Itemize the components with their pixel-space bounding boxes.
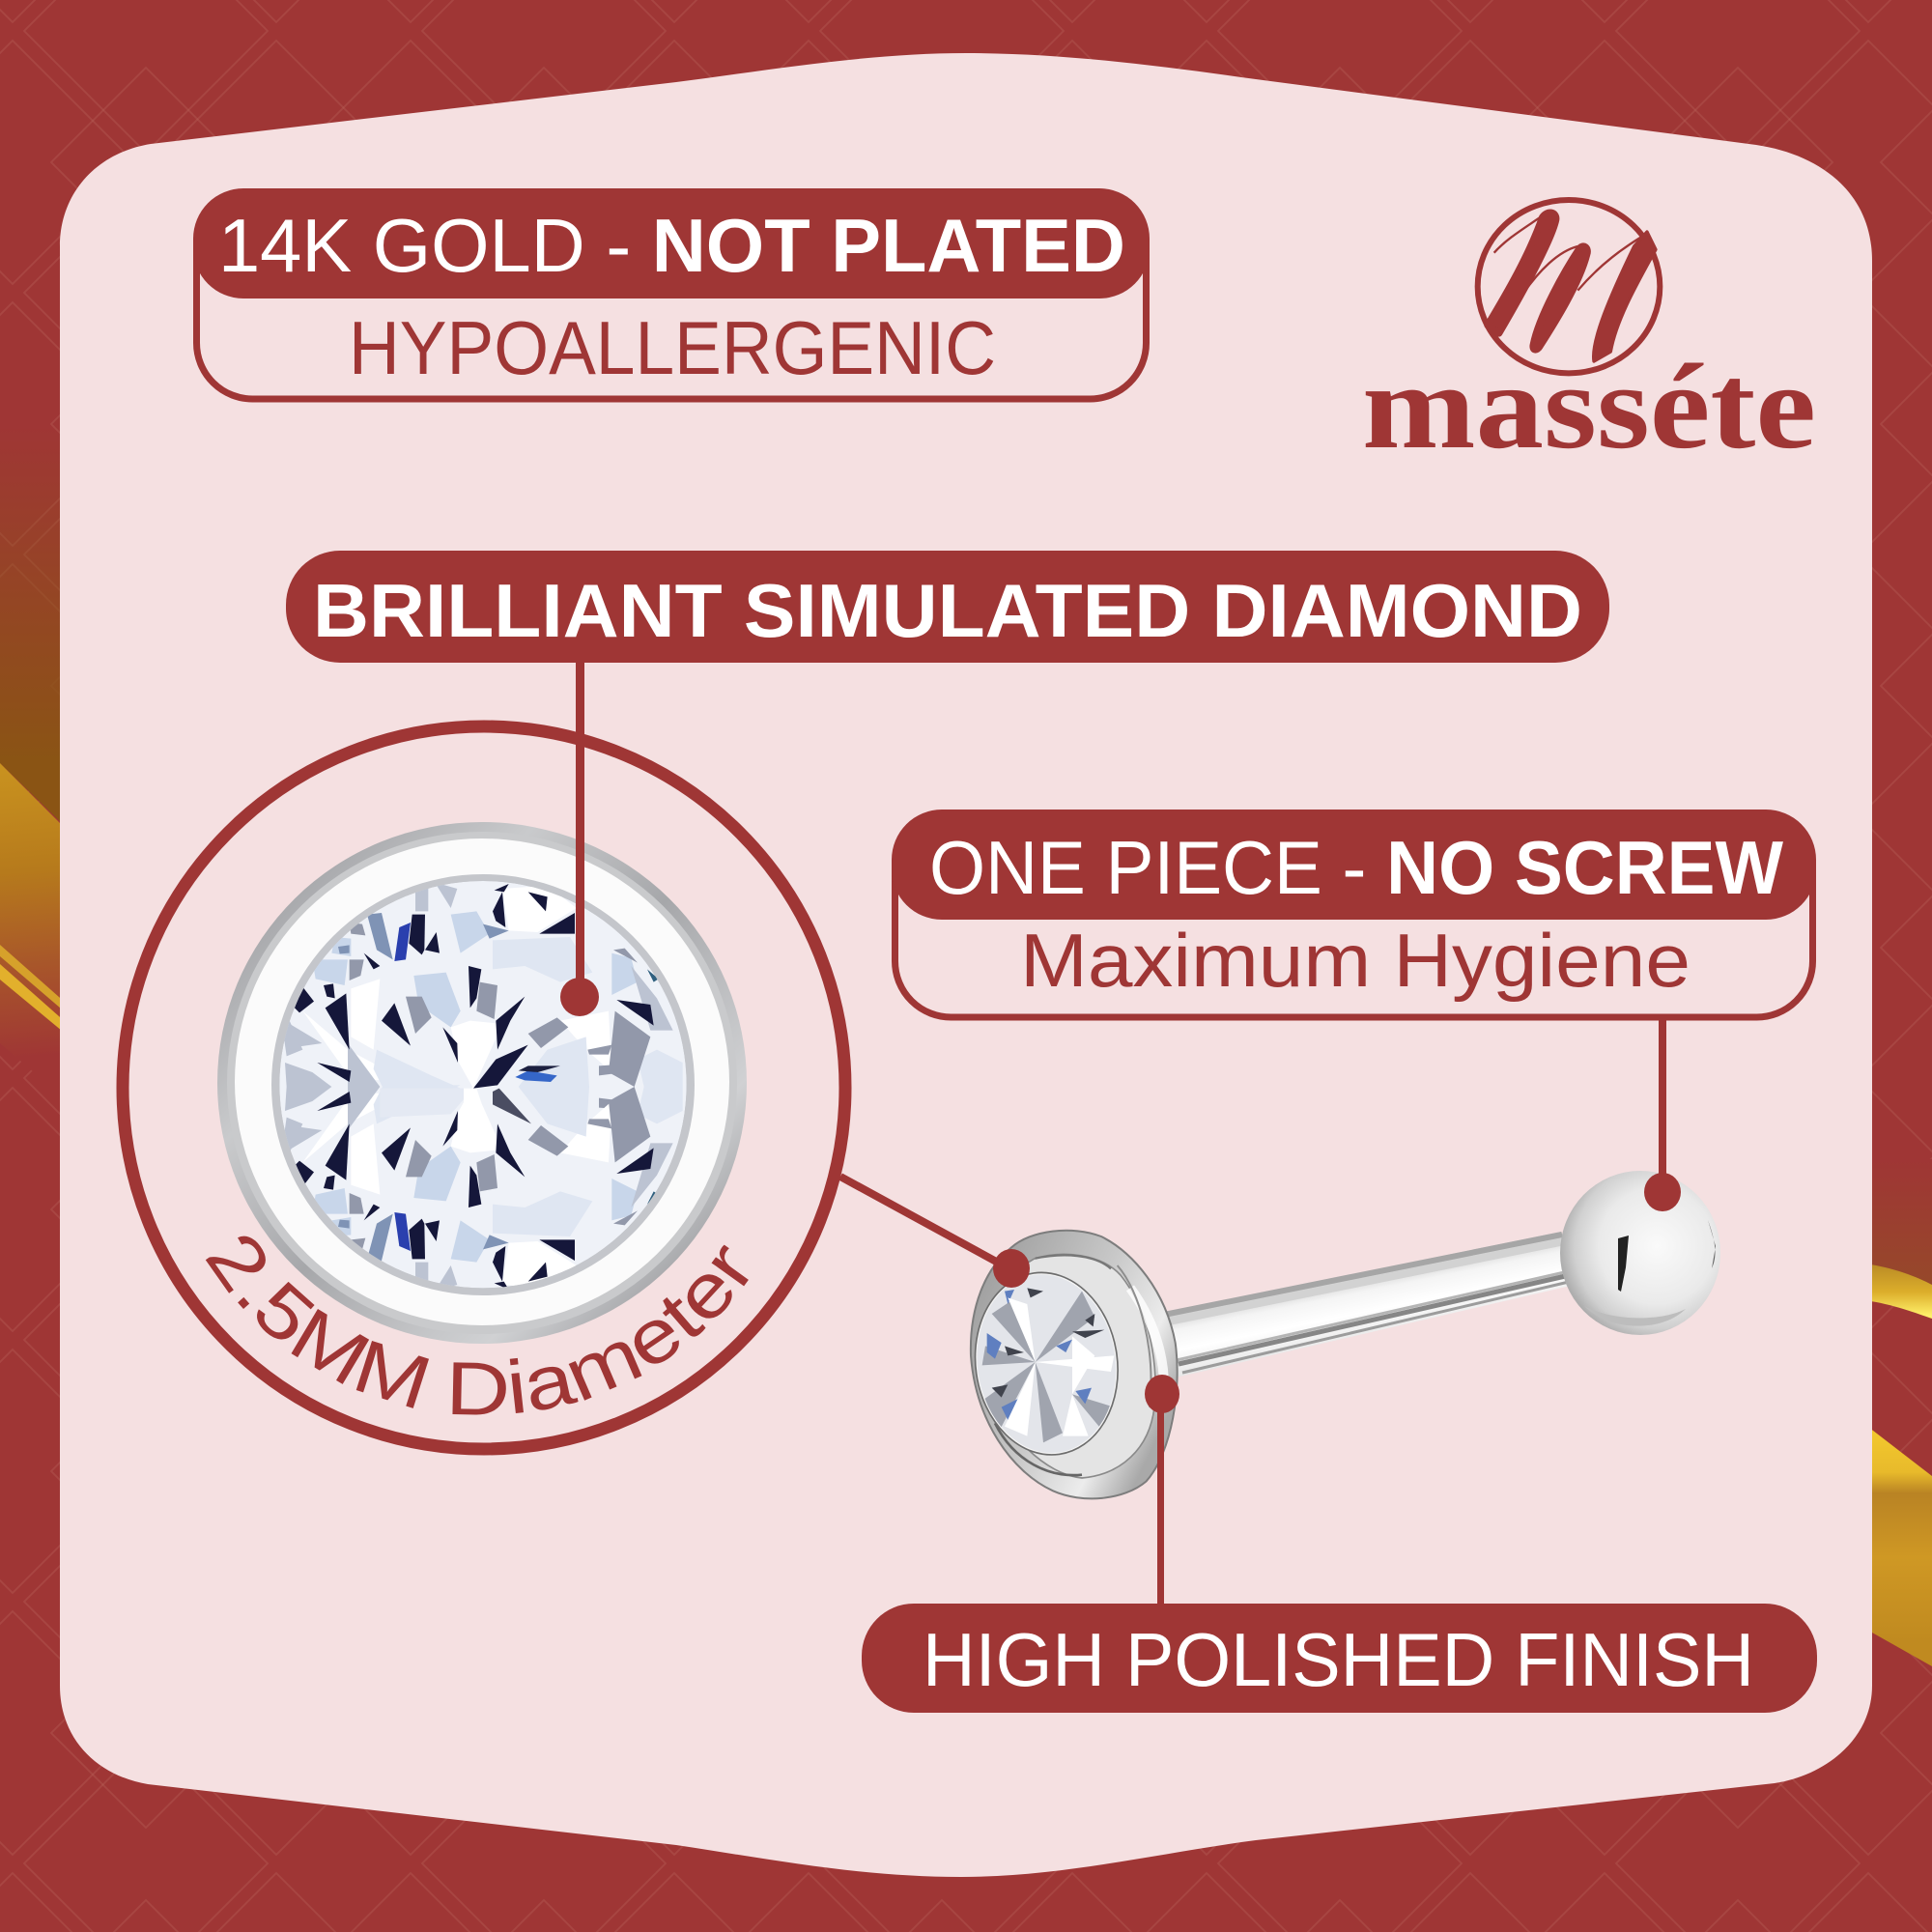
- badge: 14K gold not plated: [193, 188, 1150, 399]
- logo: massete: [1362, 200, 1816, 474]
- ball end: [1560, 1171, 1720, 1335]
- annotation: diameter: 2.5MM Diameter: [205, 1236, 749, 1414]
- shaft: [1150, 1232, 1587, 1381]
- wordmark: masséte: [1362, 340, 1816, 474]
- subheading: maximum hygiene: Maximum Hygiene: [1020, 918, 1690, 1003]
- icon: monogram in circle: [1478, 200, 1660, 373]
- badge: one piece no screw: [892, 810, 1816, 1017]
- leader line: diamond callout: [560, 661, 599, 1016]
- leader line: no screw callout: [1644, 1016, 1681, 1211]
- subheading: hypoallergenic: HYPOALLERGENIC: [349, 305, 996, 390]
- heading: one piece: ONE PIECE - NO SCREW: [929, 825, 1783, 910]
- badge: high polished finish: HIGH POLISHED FINISH: [923, 1617, 1754, 1702]
- badge: high polished finish: [862, 1604, 1817, 1713]
- product: nose stud pin: [964, 1171, 1720, 1498]
- head bezel: [964, 1231, 1178, 1498]
- icon: metal bezel: [217, 822, 747, 1344]
- badge: brilliant simulated diamond: BRILLIANT SIMULATED DIAMOND: [313, 568, 1582, 653]
- heading: 14K gold: 14K GOLD - NOT PLATED: [218, 203, 1125, 288]
- large detail circle with stone: [116, 721, 852, 1455]
- gold ribbon right edge: [1864, 1159, 1932, 1666]
- connector: detail circle to stud: [840, 1177, 1030, 1288]
- icon: small stone: [978, 1275, 1116, 1453]
- leader line: polished finish callout: [1145, 1375, 1179, 1606]
- icon: brilliant diamond facets: [279, 881, 687, 1292]
- gold ribbon left edge: [0, 425, 68, 1101]
